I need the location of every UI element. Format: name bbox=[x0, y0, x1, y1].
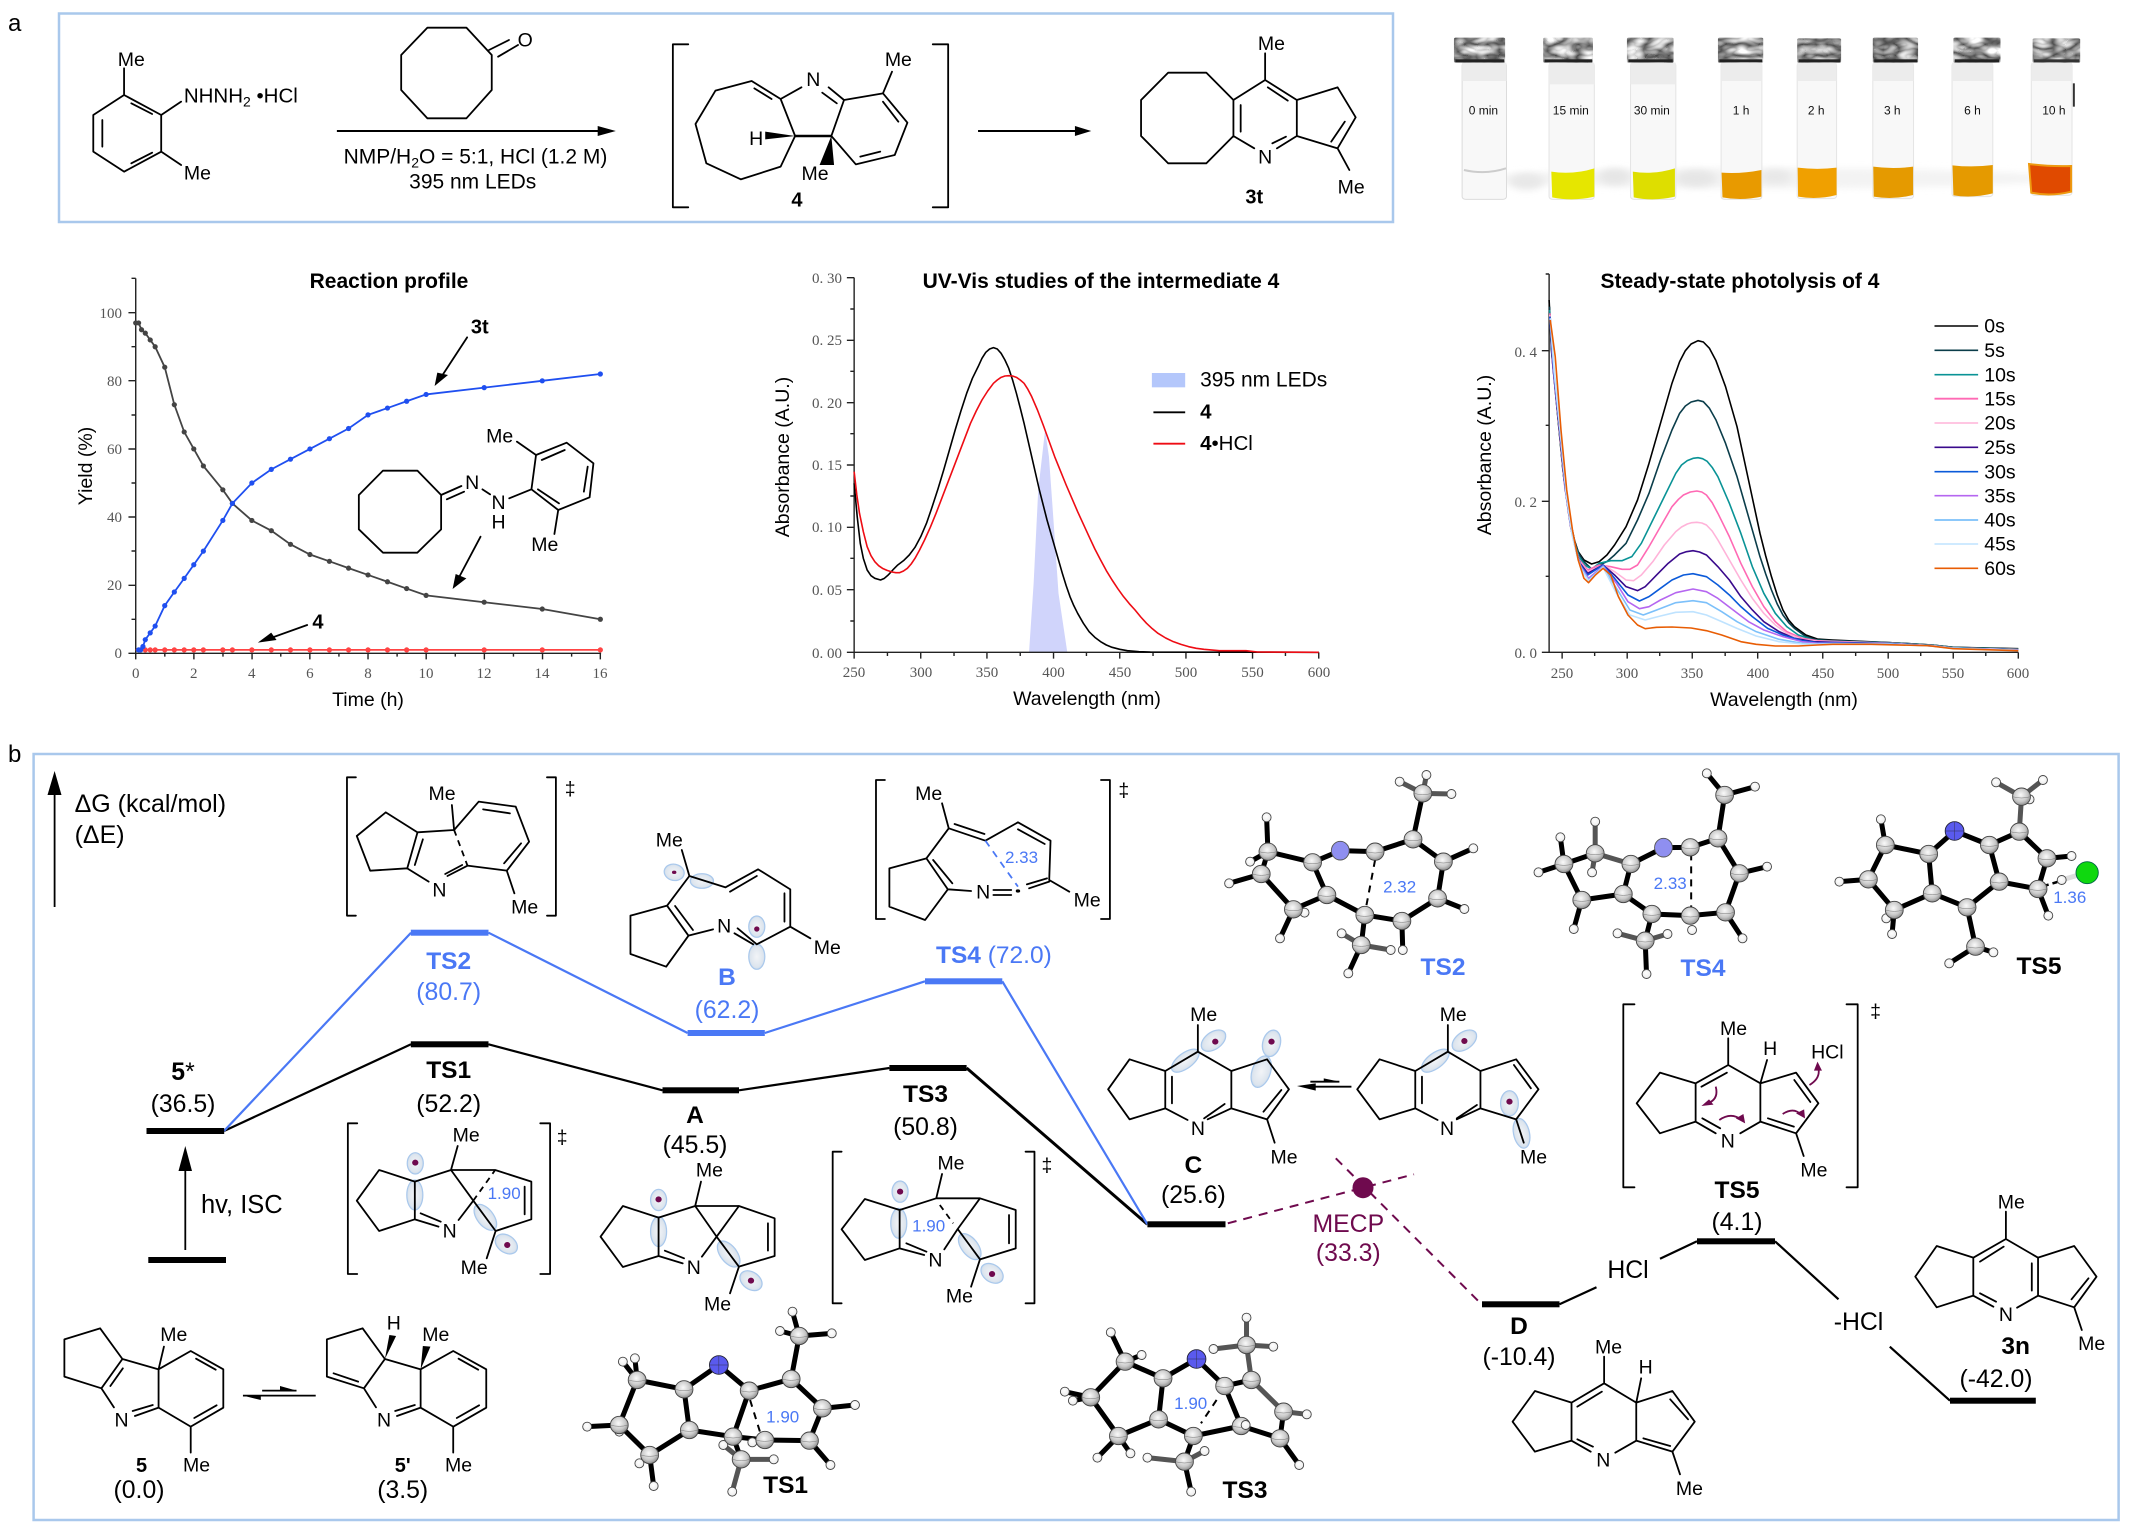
spectra time series bbox=[1549, 300, 2018, 651]
axis titles: Time (h) bbox=[332, 689, 404, 711]
label A: A bbox=[686, 1102, 704, 1129]
label 5' bbox=[377, 1455, 428, 1504]
structure: TS4 bracket: N bbox=[976, 881, 990, 903]
tick labels: 0. 00 bbox=[812, 646, 842, 662]
label 5': (3.5) bbox=[377, 1477, 428, 1504]
axes and ticks bbox=[847, 278, 1319, 659]
label MECP bbox=[1312, 1211, 1384, 1267]
axis titles: Wavelength (nm) bbox=[1710, 689, 1858, 711]
level: C bbox=[1147, 1221, 1226, 1227]
label TS1 3D: TS1 bbox=[763, 1472, 808, 1499]
tick labels bbox=[100, 306, 608, 682]
connectors: dashed MECP bbox=[1228, 1158, 1479, 1302]
vial 30 min: 30 min bbox=[1634, 103, 1670, 117]
legend: 0s bbox=[1984, 316, 2005, 338]
structure: 5': Me bbox=[422, 1324, 449, 1346]
tick labels: 450 bbox=[1109, 665, 1131, 681]
label 3n bbox=[1959, 1333, 2033, 1393]
tick labels: 300 bbox=[1616, 666, 1638, 682]
label TS5 bbox=[1712, 1177, 1762, 1236]
connectors: black to C bbox=[967, 1068, 1147, 1224]
3D model: TS2: 2.32 bbox=[1383, 877, 1416, 896]
structure: B diradical: Me bbox=[656, 830, 683, 852]
label B: B bbox=[718, 964, 736, 991]
level: B bbox=[688, 1030, 765, 1036]
structure: D: Me bbox=[1676, 1478, 1703, 1500]
structure: cyclooctanone bbox=[401, 28, 533, 118]
tick labels bbox=[1514, 345, 2029, 682]
structure: 5' bbox=[327, 1312, 486, 1477]
structure: 5': H bbox=[387, 1312, 401, 1334]
photo: vials over time bbox=[1454, 38, 2080, 199]
structure: bracketed intermediate 4: N bbox=[806, 69, 820, 91]
structure: C diradical form 1 bbox=[1108, 1004, 1298, 1168]
energy profile bbox=[146, 930, 2036, 1404]
vial 2 h bbox=[1797, 38, 1841, 199]
structure: D: H bbox=[1639, 1356, 1653, 1378]
panel: reaction scheme frame bbox=[59, 14, 1393, 222]
structure: aryl hydrazine hydrochloride: •HCl bbox=[251, 85, 298, 108]
structure: B diradical bbox=[630, 830, 841, 969]
tick labels: 20 bbox=[107, 578, 122, 594]
tick labels: 2 bbox=[190, 666, 198, 682]
structure: bracketed intermediate 4 bbox=[673, 44, 948, 212]
label 5* bbox=[151, 1059, 215, 1118]
tick labels: 300 bbox=[910, 665, 932, 681]
connectors: blue pathway bbox=[224, 933, 1147, 1224]
structure: 5: Me bbox=[183, 1455, 210, 1477]
structure: C diradical form 1: Me bbox=[1190, 1004, 1217, 1026]
point: MECP bbox=[1352, 1177, 1374, 1198]
3D model: TS3: 1.90 bbox=[1174, 1394, 1207, 1413]
series: product 3t (blue) bbox=[136, 371, 603, 652]
label D: D bbox=[1510, 1313, 1528, 1340]
label C: (25.6) bbox=[1161, 1182, 1226, 1209]
LED band bbox=[1029, 430, 1067, 652]
legend: 45s bbox=[1984, 534, 2016, 556]
label 5: 5 bbox=[136, 1455, 147, 1477]
tick labels: 0. 25 bbox=[812, 333, 842, 349]
structure: B diradical: N bbox=[717, 916, 731, 938]
label 5: (0.0) bbox=[114, 1477, 164, 1504]
axis titles: Wavelength (nm) bbox=[1013, 688, 1161, 710]
structure: C diradical form 2: N bbox=[1440, 1118, 1454, 1140]
structure: C diradical form 2: Me bbox=[1520, 1146, 1547, 1168]
panel label a: a bbox=[8, 10, 22, 37]
axis titles bbox=[772, 377, 1161, 710]
level: TS1 bbox=[411, 1041, 488, 1047]
label TS3 bbox=[893, 1081, 958, 1141]
vial 1 h bbox=[1718, 38, 1763, 199]
series: intermediate 4 (red) bbox=[136, 647, 603, 652]
data series bbox=[133, 320, 603, 652]
structure: 3n: Me bbox=[1998, 1191, 2025, 1213]
legend: 20s bbox=[1984, 413, 2016, 435]
structure: TS5 bracket with curly arrows: H bbox=[1763, 1038, 1777, 1060]
label HCl: HCl bbox=[1607, 1257, 1649, 1284]
label B: (62.2) bbox=[695, 997, 759, 1024]
label A bbox=[663, 1102, 727, 1159]
structure: C diradical form 1: N bbox=[1191, 1118, 1205, 1140]
structures of panel b bbox=[64, 769, 2105, 1500]
axis titles bbox=[1474, 375, 1858, 711]
level: 5* bbox=[146, 1128, 224, 1134]
label TS3: (50.8) bbox=[893, 1114, 958, 1141]
structure: B diradical: Me bbox=[814, 937, 841, 959]
tick labels: 0 bbox=[132, 666, 139, 682]
structure: 3n bbox=[1915, 1191, 2105, 1355]
text: reaction conditions bbox=[344, 145, 607, 193]
structure: TS2 bracket bbox=[347, 777, 576, 918]
axis titles bbox=[75, 427, 404, 711]
3D model: TS5 bbox=[1835, 775, 2098, 968]
tick labels: 12 bbox=[476, 666, 492, 682]
vial 2 h: 2 h bbox=[1808, 103, 1825, 117]
structure: 5': N bbox=[377, 1410, 391, 1432]
structure: TS3 bracket: Me bbox=[937, 1152, 965, 1174]
label TS5 3D: TS5 bbox=[2017, 953, 2061, 980]
structure: TS5 bracket with curly arrows: Me bbox=[1720, 1018, 1747, 1040]
label 5 bbox=[114, 1455, 164, 1504]
tick labels bbox=[812, 271, 1330, 681]
structure: 5: N bbox=[114, 1410, 129, 1432]
label 5': 5' bbox=[395, 1455, 411, 1477]
level: TS4 bbox=[925, 978, 1002, 984]
connectors: black pathway bbox=[224, 1044, 889, 1131]
3D model: TS4 bbox=[1534, 769, 1772, 978]
tick labels: 6 bbox=[306, 666, 314, 682]
label C: C bbox=[1185, 1152, 1203, 1179]
3D model: TS1: 1.90 bbox=[766, 1407, 799, 1426]
tick labels: 600 bbox=[1308, 665, 1330, 681]
tick labels: 350 bbox=[976, 665, 998, 681]
structure: aryl hydrazine hydrochloride: NHNH bbox=[184, 85, 243, 108]
structure: bracketed intermediate 4: 4 bbox=[791, 190, 802, 212]
label D bbox=[1482, 1313, 1556, 1371]
structure: D bbox=[1513, 1336, 1703, 1500]
legend: 60s bbox=[1984, 558, 2016, 580]
structure: A diradical: Me bbox=[704, 1294, 731, 1316]
level: TS2 bbox=[411, 930, 488, 936]
tick labels: 14 bbox=[534, 666, 550, 682]
label -HCl: -HCl bbox=[1834, 1309, 1883, 1336]
arrows: equilibrium 5 and 5' bbox=[243, 1386, 316, 1400]
structure: TS2 bracket: ‡ bbox=[565, 778, 576, 800]
label 5*: (36.5) bbox=[151, 1091, 215, 1118]
tick labels: 16 bbox=[592, 666, 608, 682]
curve: 4 HCl bbox=[854, 376, 1319, 652]
arrows: equilibrium C forms bbox=[1297, 1078, 1351, 1091]
label 3n: 3n bbox=[2001, 1333, 2030, 1360]
label TS2: (80.7) bbox=[416, 979, 481, 1006]
label MECP: MECP bbox=[1312, 1211, 1384, 1238]
structure: D: Me bbox=[1595, 1336, 1622, 1358]
vial 0 min: 0 min bbox=[1469, 103, 1498, 117]
structure: A diradical bbox=[601, 1160, 775, 1316]
structure: hydrazone: N bbox=[465, 472, 479, 494]
structure: A diradical: N bbox=[687, 1257, 701, 1279]
vial 3 h: 3 h bbox=[1884, 103, 1901, 117]
structure: 3n: Me bbox=[2078, 1333, 2105, 1355]
annotation: 3t arrow: 3t bbox=[471, 316, 489, 338]
legend: 25s bbox=[1984, 437, 2016, 459]
label hv ISC: hv, ISC bbox=[201, 1191, 283, 1219]
chart annotations and hydrazone structure bbox=[258, 316, 593, 643]
label TS1: (52.2) bbox=[416, 1091, 481, 1118]
axis: free energy: (ΔE) bbox=[75, 821, 125, 849]
structure: D: N bbox=[1596, 1450, 1610, 1472]
chart: steady-state photolysis bbox=[1474, 270, 2029, 711]
structure: 5': Me bbox=[445, 1455, 472, 1477]
legend: 4 bbox=[1200, 400, 1212, 423]
structure: hydrazone: N bbox=[491, 492, 506, 514]
label A: (45.5) bbox=[663, 1132, 727, 1159]
label MECP: (33.3) bbox=[1316, 1240, 1381, 1267]
structure: TS3 bracket bbox=[833, 1152, 1052, 1308]
structure: bracketed intermediate 4: Me bbox=[885, 49, 912, 71]
legend: 395 nm LEDs bbox=[1200, 369, 1327, 392]
label 3n: (-42.0) bbox=[1959, 1366, 2033, 1393]
structure: TS1 bracket: Me bbox=[453, 1125, 480, 1147]
structure: TS4 bracket: Me bbox=[1074, 890, 1101, 912]
tick labels: 4 bbox=[248, 666, 256, 682]
structure: TS1 bracket: N bbox=[443, 1221, 457, 1243]
tick labels: 400 bbox=[1747, 666, 1769, 682]
structure: hydrazone bbox=[359, 425, 593, 556]
text: reaction conditions: NMP/H bbox=[344, 145, 411, 168]
arrow: to product bbox=[978, 126, 1091, 136]
structure: TS4 bracket: 2.33 bbox=[1005, 848, 1038, 867]
vial 1 h: 1 h bbox=[1733, 103, 1749, 117]
structure: TS5 bracket with curly arrows: N bbox=[1721, 1130, 1735, 1152]
vial 3 h bbox=[1873, 38, 1918, 199]
chart title: Reaction profile bbox=[310, 270, 468, 293]
structure: product 3t: N bbox=[1258, 146, 1272, 168]
tick labels: 0. 05 bbox=[812, 583, 842, 599]
label TS3: TS3 bbox=[903, 1081, 948, 1108]
energy labels bbox=[114, 942, 2061, 1504]
structure: aryl hydrazine hydrochloride: 2 bbox=[243, 94, 251, 110]
label B bbox=[695, 964, 759, 1024]
structure: TS1 bracket: ‡ bbox=[557, 1126, 568, 1148]
structure: TS4 bracket: Me bbox=[915, 783, 942, 805]
axis titles: Absorbance (A.U.) bbox=[1474, 375, 1496, 535]
label C bbox=[1161, 1152, 1226, 1209]
structure: bracketed intermediate 4: Me bbox=[802, 163, 829, 185]
structure: TS5 bracket with curly arrows: Me bbox=[1800, 1160, 1827, 1182]
vial 30 min bbox=[1627, 38, 1676, 199]
chart: UV-Vis bbox=[772, 270, 1330, 710]
tick labels: 0. 4 bbox=[1514, 345, 1538, 361]
reaction scheme bbox=[93, 28, 1365, 212]
structure: hydrazone: Me bbox=[531, 534, 558, 556]
structure: C diradical form 1: Me bbox=[1270, 1146, 1298, 1168]
tick labels: 100 bbox=[100, 306, 122, 322]
level: TS3 bbox=[889, 1065, 967, 1071]
structure: TS4 bracket bbox=[876, 780, 1129, 920]
structure: aryl hydrazine hydrochloride bbox=[93, 49, 298, 184]
structure: TS3 bracket: 1.90 bbox=[912, 1216, 945, 1235]
structure: hydrazone: H bbox=[491, 511, 506, 533]
3D model: TS5: 1.36 bbox=[2053, 888, 2086, 907]
legend: 4•HCl bbox=[1200, 432, 1253, 455]
structure: bracketed intermediate 4: H bbox=[749, 128, 763, 150]
tick labels: 8 bbox=[364, 666, 372, 682]
vial 6 h: 6 h bbox=[1964, 103, 1981, 117]
structure: TS5 bracket with curly arrows: ‡ bbox=[1870, 1000, 1881, 1022]
annotation: 4 arrow bbox=[258, 611, 323, 643]
tick labels: 0. 2 bbox=[1514, 495, 1537, 511]
structure: product 3t: Me bbox=[1338, 176, 1365, 198]
panel: energy diagram frame bbox=[34, 754, 2119, 1520]
tick labels: 80 bbox=[107, 374, 122, 390]
vial 10 h: 10 h bbox=[2042, 103, 2066, 117]
structure: product 3t: 3t bbox=[1245, 186, 1263, 208]
structure: 3n: N bbox=[1999, 1304, 2013, 1326]
axes and ticks bbox=[1542, 274, 2018, 659]
tick labels: 250 bbox=[1551, 666, 1573, 682]
vial 15 min: 15 min bbox=[1553, 103, 1589, 117]
label TS1 bbox=[416, 1057, 481, 1118]
structure: TS5 bracket with curly arrows bbox=[1623, 1000, 1881, 1187]
chart title: Steady-state photolysis of 4 bbox=[1601, 270, 1880, 293]
structure: TS2 bracket: N bbox=[432, 880, 446, 902]
3D model: TS2 bbox=[1225, 770, 1478, 978]
legend: 40s bbox=[1984, 510, 2016, 532]
structure: hydrazone: Me bbox=[486, 425, 513, 447]
legend: 35s bbox=[1984, 485, 2016, 507]
vial 0 min bbox=[1454, 38, 1506, 199]
label D: (-10.4) bbox=[1482, 1344, 1556, 1371]
arrow: hv excitation bbox=[178, 1146, 192, 1250]
structure: TS1 bracket bbox=[348, 1123, 568, 1279]
tick labels: 350 bbox=[1681, 666, 1703, 682]
legend: 10s bbox=[1984, 364, 2016, 386]
axis: free energy: ΔG (kcal/mol) bbox=[75, 790, 226, 818]
tick labels: 550 bbox=[1241, 665, 1264, 681]
structure: TS3 bracket: Me bbox=[946, 1286, 973, 1308]
legend bbox=[1934, 316, 2016, 580]
curve: 4 bbox=[854, 348, 1319, 652]
structure: C diradical form 2: Me bbox=[1440, 1004, 1467, 1026]
structure: TS1 bracket: 1.90 bbox=[488, 1184, 521, 1203]
legend: 5s bbox=[1984, 340, 2005, 362]
structure: TS2 bracket: Me bbox=[511, 896, 538, 918]
structure: product 3t bbox=[1141, 33, 1365, 208]
label TS2 bbox=[416, 948, 481, 1006]
arrow: reaction conditions bbox=[337, 126, 616, 136]
text: reaction conditions: 395 nm LEDs bbox=[409, 170, 536, 193]
structure: A diradical: Me bbox=[696, 1160, 723, 1182]
tick labels: 0. 0 bbox=[1514, 646, 1537, 662]
label TS4: TS4 (72.0) bbox=[936, 942, 1052, 969]
text: reaction conditions: 2 bbox=[411, 154, 419, 170]
structure: TS4 bracket: ‡ bbox=[1118, 780, 1129, 802]
tick labels: 60 bbox=[107, 442, 122, 458]
tick labels: 500 bbox=[1877, 666, 1899, 682]
tick labels: 40 bbox=[107, 510, 122, 526]
label TS5: (4.1) bbox=[1712, 1209, 1762, 1236]
label TS1: TS1 bbox=[426, 1057, 471, 1084]
label TS2 3D: TS2 bbox=[1421, 954, 1465, 981]
tick labels: 0. 10 bbox=[812, 520, 842, 536]
level: TS5 bbox=[1697, 1238, 1775, 1244]
structure: TS5 bracket with curly arrows: HCl bbox=[1811, 1041, 1844, 1063]
structure: 5 bbox=[64, 1324, 223, 1477]
structure: product 3t: Me bbox=[1258, 33, 1285, 55]
3D model: TS1 bbox=[583, 1307, 859, 1496]
axis titles: Absorbance (A.U.) bbox=[772, 377, 794, 537]
vial 15 min bbox=[1543, 38, 1594, 199]
tick labels: 0. 30 bbox=[812, 271, 842, 287]
tick labels: 550 bbox=[1942, 666, 1964, 682]
series: starting hydrazone (gray) bbox=[133, 320, 603, 622]
vial 10 h bbox=[2029, 38, 2080, 195]
tick labels: 250 bbox=[843, 665, 865, 681]
chart title: UV-Vis studies of the intermediate 4 bbox=[923, 270, 1280, 293]
tick labels: 500 bbox=[1175, 665, 1197, 681]
connectors: HCl steps bbox=[1560, 1241, 1950, 1401]
structure: cyclooctanone: O bbox=[518, 30, 533, 52]
chart: reaction profile bbox=[75, 270, 608, 711]
panel label b: b bbox=[8, 741, 21, 768]
tick labels: 10 bbox=[418, 666, 434, 682]
structure: TS2 bracket: Me bbox=[429, 783, 456, 805]
label TS4 3D: TS4 bbox=[1681, 955, 1726, 982]
structure: aryl hydrazine hydrochloride: Me bbox=[184, 162, 211, 184]
tick labels: 400 bbox=[1042, 665, 1065, 681]
structure: C diradical form 2 bbox=[1357, 1004, 1547, 1168]
label TS2: TS2 bbox=[426, 948, 471, 975]
axis: free energy bbox=[48, 771, 226, 907]
structure: TS3 bracket: ‡ bbox=[1042, 1155, 1052, 1177]
level: 3n bbox=[1950, 1398, 2036, 1404]
legend: 15s bbox=[1984, 388, 2016, 410]
level: A bbox=[662, 1087, 739, 1093]
level: ground state 5 bbox=[148, 1257, 226, 1263]
legend: 30s bbox=[1984, 461, 2016, 483]
structure: TS3 bracket: N bbox=[928, 1250, 942, 1272]
legend bbox=[1152, 369, 1327, 455]
level: D bbox=[1482, 1301, 1560, 1307]
text: reaction conditions: O = 5:1, HCl (1.2 M) bbox=[419, 145, 607, 168]
3D model: TS3 bbox=[1060, 1313, 1311, 1496]
3D model: TS4: 2.33 bbox=[1654, 874, 1687, 893]
structure: aryl hydrazine hydrochloride: Me bbox=[118, 49, 145, 71]
annotation: 3t arrow bbox=[435, 316, 489, 386]
label TS5: TS5 bbox=[1715, 1177, 1759, 1204]
annotation: hydrazone arrow bbox=[453, 537, 481, 589]
tick labels: 0 bbox=[114, 646, 122, 662]
tick labels: 450 bbox=[1812, 666, 1834, 682]
tick labels: 0. 15 bbox=[812, 458, 842, 474]
label TS3 3D: TS3 bbox=[1223, 1477, 1267, 1504]
annotation: 4 arrow: 4 bbox=[312, 611, 323, 633]
vial 6 h bbox=[1952, 38, 2000, 197]
tick labels: 0. 20 bbox=[812, 396, 842, 412]
tick labels: 600 bbox=[2007, 666, 2029, 682]
structure: TS1 bracket: Me bbox=[461, 1257, 488, 1279]
structure: 5: Me bbox=[160, 1324, 187, 1346]
axis titles: Yield (%) bbox=[75, 427, 97, 505]
label 5*: 5* bbox=[171, 1059, 195, 1086]
axes and ticks bbox=[128, 278, 601, 659]
